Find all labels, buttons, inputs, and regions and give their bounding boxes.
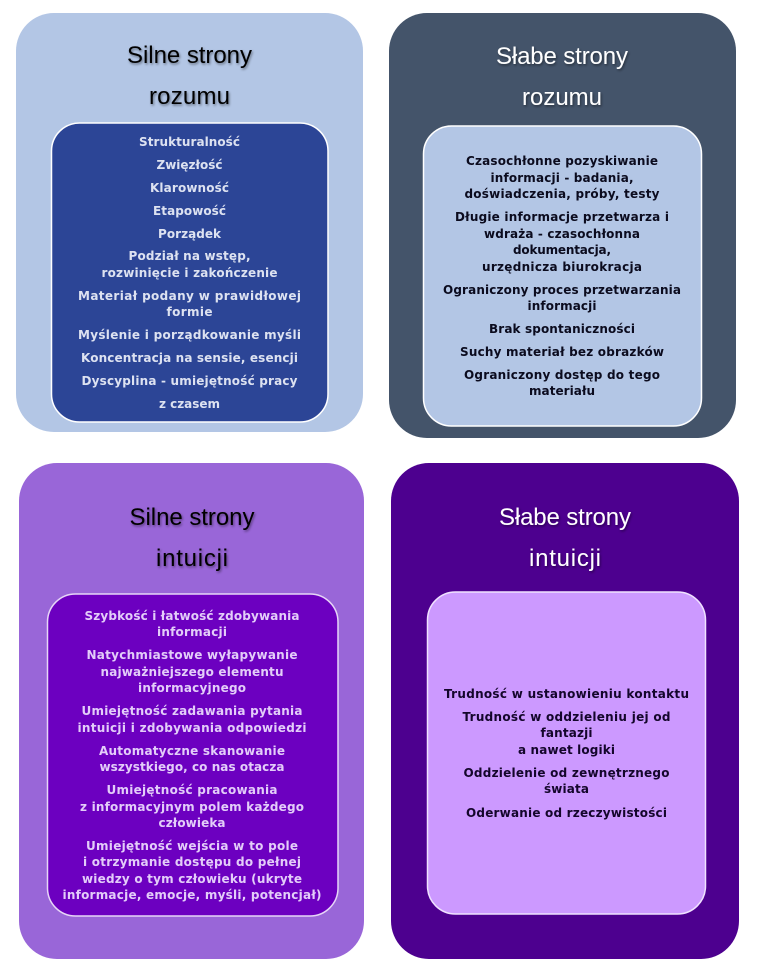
- text block: silne strony intuicji: najważniejszego elementu: [100, 665, 284, 679]
- text block: silne strony rozumu: [78, 135, 301, 411]
- text block: silne strony rozumu: Porządek: [158, 227, 222, 241]
- text block: silne strony intuicji: Umiejętność pracowania: [106, 783, 278, 797]
- heading: słabe strony intuicji: [499, 504, 631, 572]
- heading: słabe strony rozumu: rozumu: [522, 84, 602, 111]
- text block: silne strony rozumu: Koncentracja na sensie, esencji: [81, 351, 298, 365]
- text block: słabe strony rozumu: Czasochłonne pozyskiwanie: [466, 154, 658, 168]
- heading: silne strony rozumu: [127, 42, 252, 110]
- heading: słabe strony intuicji: Słabe strony: [499, 504, 631, 531]
- text block: silne strony rozumu: Strukturalność: [139, 135, 240, 149]
- heading: silne strony rozumu: rozumu: [149, 83, 230, 110]
- heading: silne strony intuicji: [130, 504, 254, 572]
- inner card: lista słabych stron intuicji: [428, 592, 706, 914]
- text block: silne strony rozumu: z czasem: [159, 397, 220, 411]
- text block: silne strony intuicji: z informacyjnym polem każdego: [80, 800, 304, 814]
- heading: silne strony intuicji: intuicji: [156, 545, 228, 572]
- text block: silne strony intuicji: informacji: [157, 625, 227, 639]
- heading: słabe strony rozumu: [496, 43, 628, 111]
- text block: silne strony intuicji: Natychmiastowe wyłapywanie: [86, 648, 298, 662]
- text block: słabe strony rozumu: materiału: [529, 384, 595, 398]
- text block: silne strony intuicji: Umiejętność zadawania pytania: [82, 704, 302, 718]
- text block: silne strony intuicji: Umiejętność wejścia w to pole: [86, 839, 298, 853]
- text block: silne strony intuicji: człowieka: [158, 816, 226, 830]
- inner card: lista silnych stron rozumu: [52, 123, 328, 422]
- text block: słabe strony intuicji: Trudność w oddzieleniu jej od: [462, 710, 670, 724]
- text block: silne strony rozumu: Myślenie i porządkowanie myśli: [78, 328, 301, 342]
- text block: słabe strony intuicji: Oderwanie od rzeczywistości: [466, 806, 667, 820]
- text block: silne strony rozumu: Klarowność: [150, 181, 229, 195]
- text block: silne strony rozumu: Etapowość: [153, 204, 226, 218]
- text block: słabe strony rozumu: doświadczenia, próby, testy: [464, 187, 660, 201]
- text block: słabe strony intuicji: Oddzielenie od zewnętrznego: [464, 766, 670, 780]
- text block: słabe strony intuicji: Trudność w ustanowieniu kontaktu: [444, 687, 689, 701]
- text block: słabe strony intuicji: a nawet logiki: [518, 743, 615, 757]
- text block: słabe strony rozumu: dokumentacja,: [513, 243, 611, 257]
- text block: silne strony intuicji: informacyjnego: [138, 681, 246, 695]
- text block: silne strony intuicji: informacje, emocje, myśli, potencjał): [62, 888, 322, 902]
- heading: słabe strony rozumu: Słabe strony: [496, 43, 628, 70]
- heading: silne strony rozumu: Silne strony: [127, 42, 252, 69]
- text block: słabe strony intuicji: świata: [544, 782, 589, 796]
- text block: słabe strony intuicji: fantazji: [540, 726, 592, 740]
- text block: silne strony intuicji: intuicji i zdobywania odpowiedzi: [78, 721, 306, 735]
- text block: słabe strony intuicji: [444, 687, 689, 820]
- heading: słabe strony intuicji: intuicji: [529, 545, 601, 572]
- text block: silne strony intuicji: wiedzy o tym człowieku (ukryte: [82, 872, 302, 886]
- text block: słabe strony rozumu: urzędnicza biurokracja: [482, 260, 642, 274]
- text block: silne strony rozumu: formie: [166, 305, 212, 319]
- text block: słabe strony rozumu: wdraża - czasochłonna: [484, 227, 640, 241]
- text block: silne strony intuicji: Automatyczne skanowanie: [99, 744, 285, 758]
- text block: słabe strony rozumu: Brak spontaniczności: [489, 322, 635, 336]
- text block: słabe strony rozumu: Ograniczony dostęp do tego: [464, 368, 660, 382]
- text block: silne strony intuicji: Szybkość i łatwość zdobywania: [84, 609, 300, 623]
- panel: silne strony rozumu: [16, 13, 363, 432]
- text block: słabe strony rozumu: informacji - badania,: [490, 171, 634, 185]
- inner card: lista silnych stron intuicji: [48, 594, 338, 916]
- text block: silne strony rozumu: Dyscyplina - umiejętność pracy: [82, 374, 298, 388]
- text block: silne strony rozumu: Podział na wstęp,: [128, 249, 250, 263]
- text block: silne strony rozumu: rozwinięcie i zakończenie: [102, 266, 278, 280]
- panel: słabe strony intuicji: [391, 463, 739, 959]
- text block: silne strony intuicji: [62, 609, 322, 902]
- text block: silne strony rozumu: Zwięzłość: [156, 158, 222, 172]
- text block: słabe strony rozumu: Ograniczony proces przetwarzania: [443, 283, 681, 297]
- panel: słabe strony rozumu: [389, 13, 736, 438]
- text block: słabe strony rozumu: Suchy materiał bez obrazków: [460, 345, 664, 359]
- text block: słabe strony rozumu: [443, 154, 681, 398]
- text block: słabe strony rozumu: Długie informacje przetwarza i: [455, 210, 669, 224]
- panel: silne strony intuicji: [19, 463, 364, 959]
- text block: silne strony intuicji: wszystkiego, co nas otacza: [100, 760, 284, 774]
- text block: silne strony intuicji: i otrzymanie dostępu do pełnej: [83, 855, 301, 869]
- text block: słabe strony rozumu: informacji: [528, 299, 596, 313]
- text block: silne strony rozumu: Materiał podany w prawidłowej: [78, 289, 301, 303]
- heading: silne strony intuicji: Silne strony: [130, 504, 254, 531]
- inner card: lista słabych stron rozumu: [424, 126, 702, 426]
